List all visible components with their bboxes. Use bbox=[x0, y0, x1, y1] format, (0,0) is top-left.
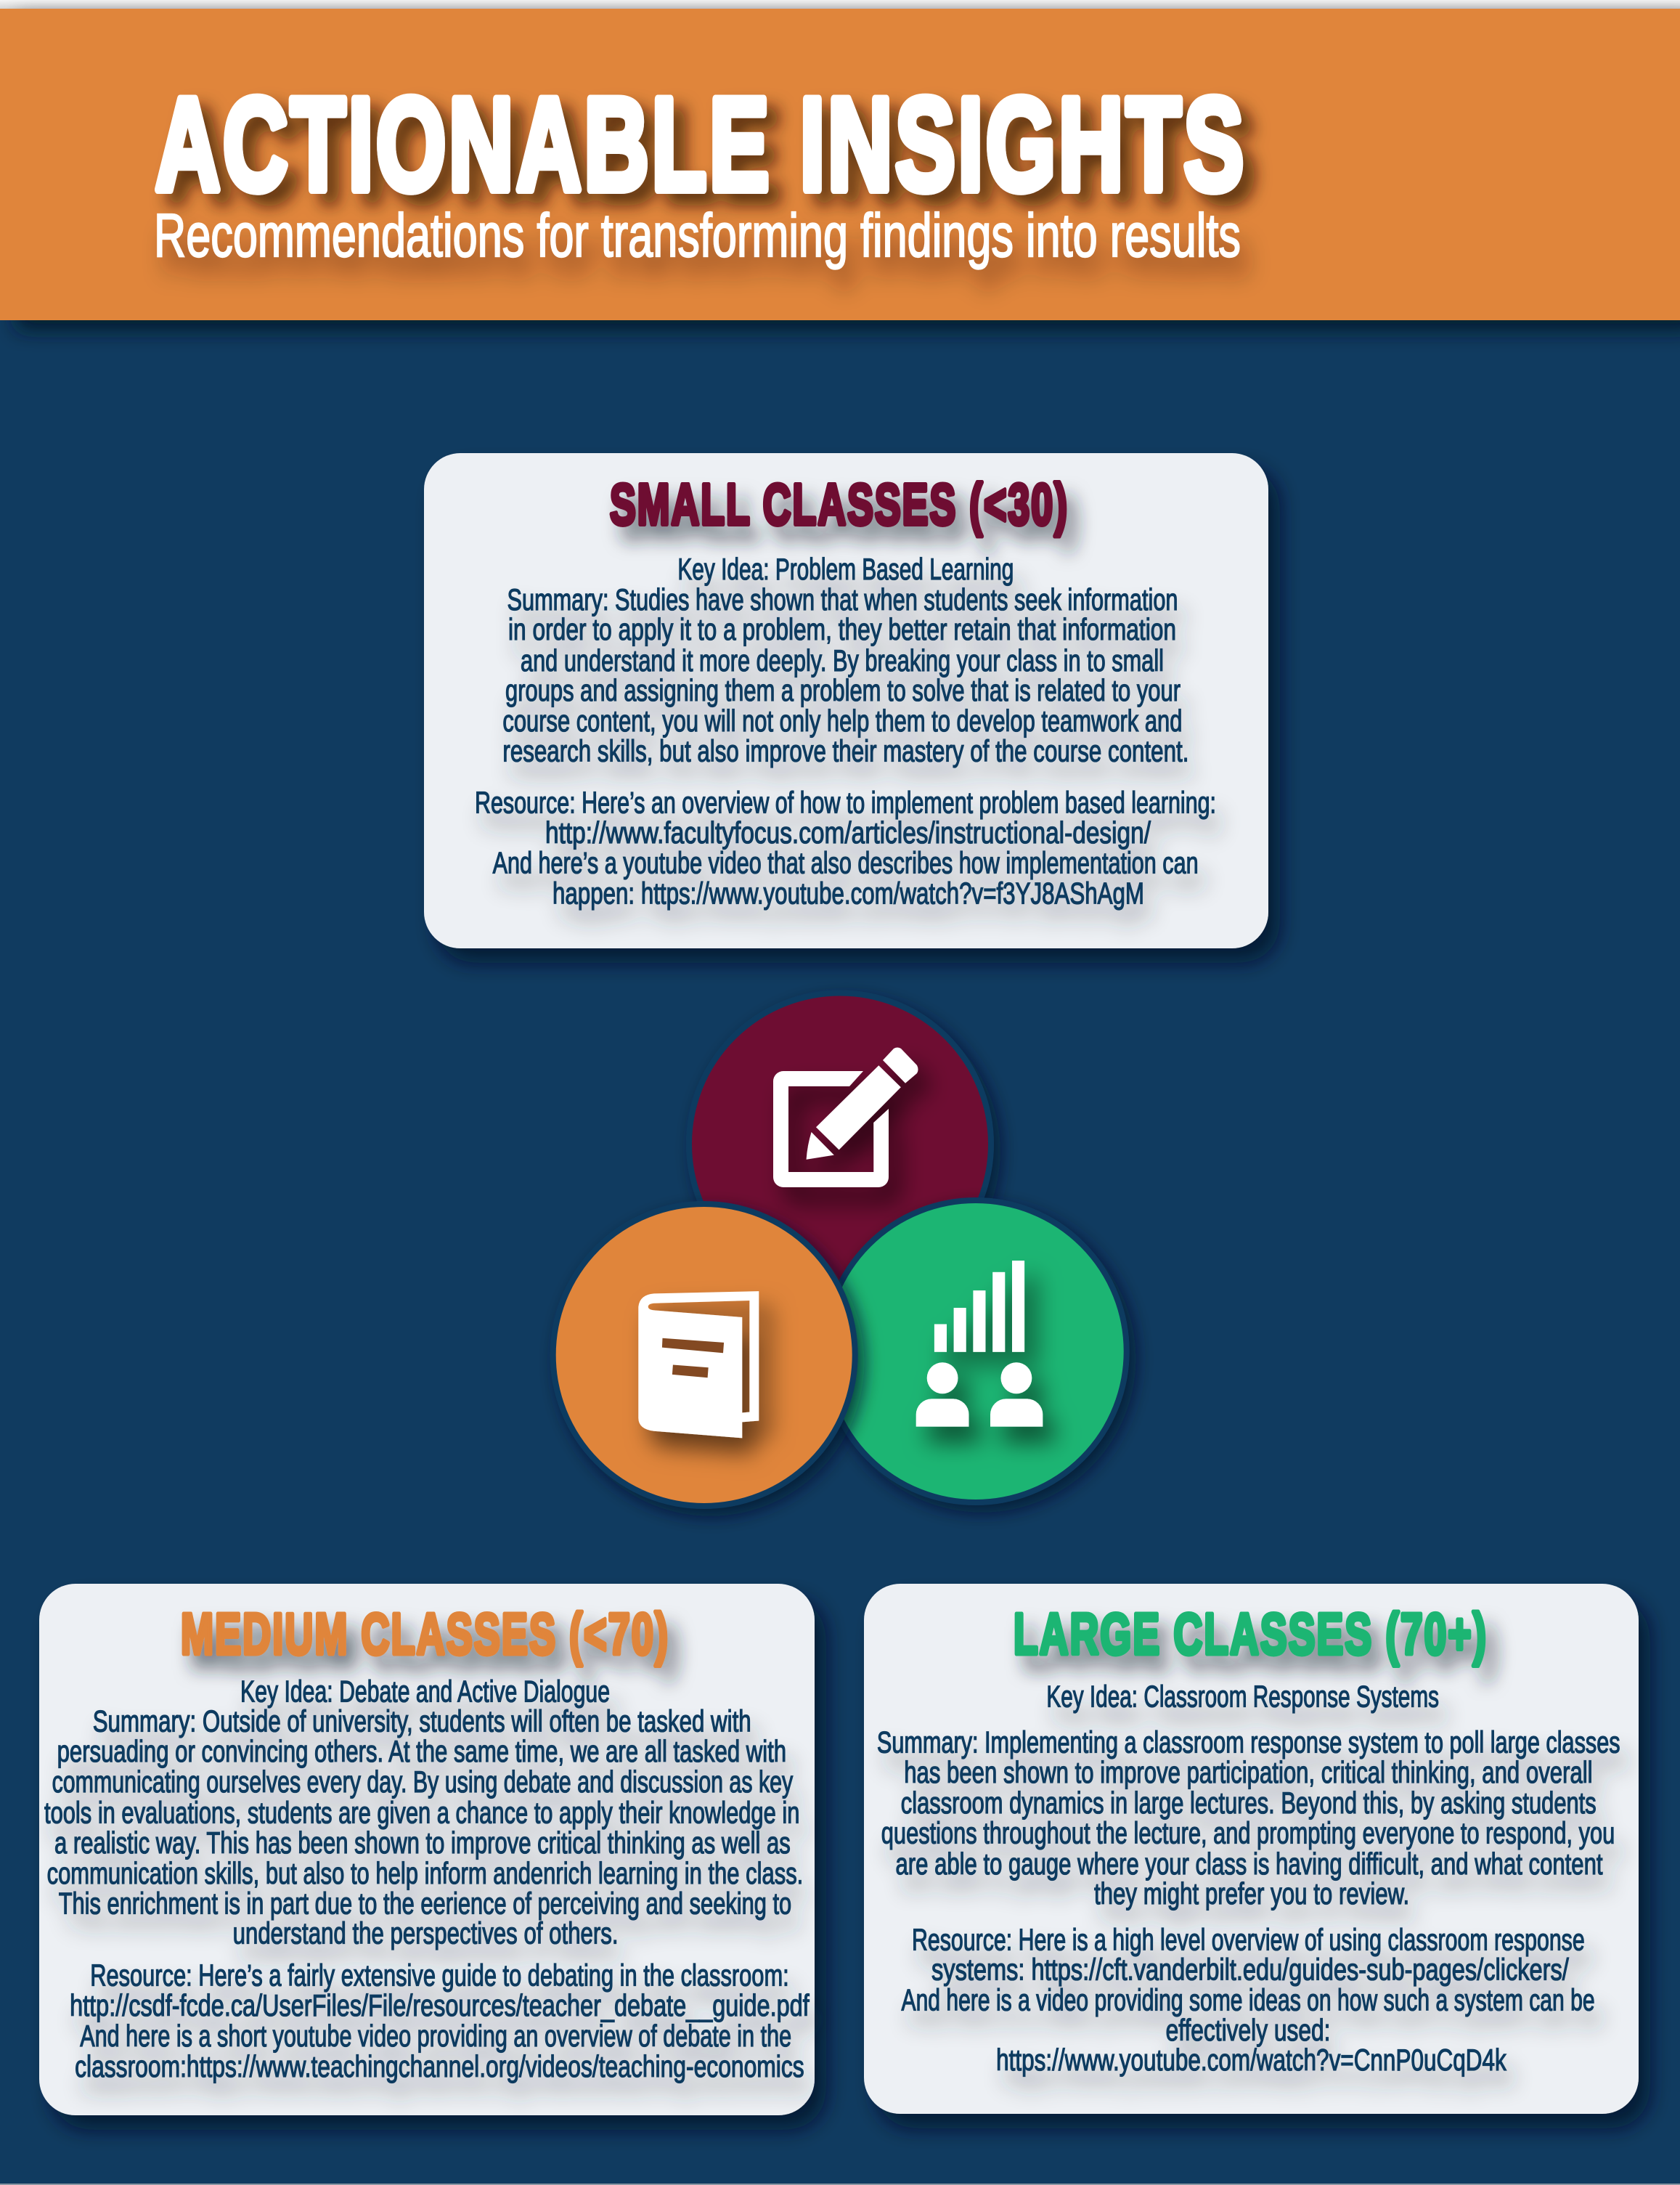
text block: large classes key idea, summary and resource: they might prefer you to review. bbox=[1094, 1876, 1409, 1911]
panel: large classes bbox=[864, 1584, 1639, 2114]
text block: large classes key idea, summary and resource bbox=[877, 1679, 1620, 2077]
text block: small classes key idea, summary and resource: happen: https://www.youtube.com/watch?v=f3YJ8AShAgM bbox=[552, 876, 1144, 911]
text block: small classes key idea, summary and resource: Summary: Studies have shown that when students seek information bbox=[507, 582, 1178, 617]
text block: medium classes key idea, summary and resource: Summary: Outside of university, students will often be tasked with bbox=[93, 1704, 751, 1738]
heading: small classes: SMALL CLASSES (<30) bbox=[610, 472, 1069, 537]
text block: small classes key idea, summary and resource: and understand it more deeply. By breaking your class in to small bbox=[521, 643, 1164, 678]
large classes card bbox=[864, 1584, 1639, 2114]
text block: medium classes key idea, summary and resource: And here is a short youtube video providing an overview of debate in the bbox=[80, 2019, 791, 2053]
icon: book bbox=[638, 1291, 759, 1438]
icon: bars and two people bbox=[916, 1261, 1043, 1427]
text block: large classes key idea, summary and resource: effectively used: bbox=[1166, 2013, 1330, 2047]
icon: pencil and square bbox=[773, 1047, 918, 1187]
text block: small classes key idea, summary and resource bbox=[475, 552, 1216, 911]
small classes card bbox=[424, 453, 1268, 948]
circle: maroon with pencil icon bbox=[689, 993, 991, 1295]
text block: medium classes key idea, summary and resource: Resource: Here’s a fairly extensive guide to debating in the classroom: bbox=[90, 1958, 789, 1993]
text block: medium classes key idea, summary and resource: understand the perspectives of others. bbox=[233, 1916, 619, 1950]
heading: medium classes: MEDIUM CLASSES (<70) bbox=[181, 1602, 669, 1666]
text block: medium classes key idea, summary and resource: classroom:https://www.teachingchannel.org/videos/teaching-economics bbox=[75, 2049, 804, 2083]
text block: small classes key idea, summary and resource: research skills, but also improve their mastery of the course content. bbox=[502, 733, 1188, 768]
text block: medium classes key idea, summary and resource: This enrichment is in part due to the eerience of perceiving and seeking to bbox=[59, 1886, 791, 1920]
circle: green with chart and people icon bbox=[825, 1200, 1127, 1502]
text block: medium classes key idea, summary and resource: communication skills, but also to help inform andenrich learning in the class. bbox=[47, 1856, 803, 1890]
top edge strip bbox=[0, 0, 1680, 9]
text block: large classes key idea, summary and resource: https://www.youtube.com/watch?v=CnnP0uCqD4k bbox=[996, 2043, 1506, 2077]
text block: small classes key idea, summary and resource: http://www.facultyfocus.com/articles/instructional-design/ bbox=[545, 815, 1151, 850]
panel: medium classes bbox=[39, 1584, 815, 2115]
text block: medium classes key idea, summary and resource: Key Idea: Debate and Active Dialogue bbox=[240, 1675, 610, 1708]
text block: small classes key idea, summary and resource: And here’s a youtube video that also describes how implementation can bbox=[493, 845, 1199, 880]
circle: orange with book icon bbox=[553, 1204, 855, 1506]
text block: medium classes key idea, summary and resource: persuading or convincing others. At the same time, we are all tasked with bbox=[57, 1734, 786, 1768]
text block: medium classes key idea, summary and resource: communicating ourselves every day. By using debate and discussion as key bbox=[52, 1765, 793, 1799]
text block: small classes key idea, summary and resource: groups and assigning them a problem to solve that is related to your bbox=[505, 673, 1181, 707]
bottom edge strip bbox=[0, 2184, 1680, 2185]
text block: medium classes key idea, summary and resource: a realistic way. This has been shown to improve critical thinking as well as bbox=[54, 1826, 791, 1860]
header banner bbox=[0, 9, 1680, 320]
text block: medium classes key idea, summary and resource: tools in evaluations, students are given a chance to apply their knowledge in bbox=[44, 1795, 799, 1829]
text block: small classes key idea, summary and resource: Resource: Here’s an overview of how to implement problem based learning: bbox=[475, 786, 1216, 819]
icon cluster: three circles bbox=[553, 993, 1127, 1506]
header background bbox=[0, 9, 1680, 320]
text block: small classes key idea, summary and resource: course content, you will not only help them to develop teamwork and bbox=[502, 704, 1182, 738]
panel: small classes bbox=[424, 453, 1268, 948]
text block: large classes key idea, summary and resource: Key Idea: Classroom Response Systems bbox=[1046, 1679, 1439, 1713]
medium classes card bbox=[39, 1584, 815, 2115]
text block: medium classes key idea, summary and resource bbox=[44, 1675, 810, 2083]
text block: small classes key idea, summary and resource: in order to apply it to a problem, they better retain that information bbox=[508, 612, 1176, 646]
text block: medium classes key idea, summary and resource: http://csdf-fcde.ca/UserFiles/File/resources/teacher_debate__guide.pdf bbox=[70, 1988, 810, 2022]
subtitle: Recommendations for transforming findings into results bbox=[154, 201, 1241, 269]
text block: small classes key idea, summary and resource: Key Idea: Problem Based Learning bbox=[677, 552, 1014, 586]
